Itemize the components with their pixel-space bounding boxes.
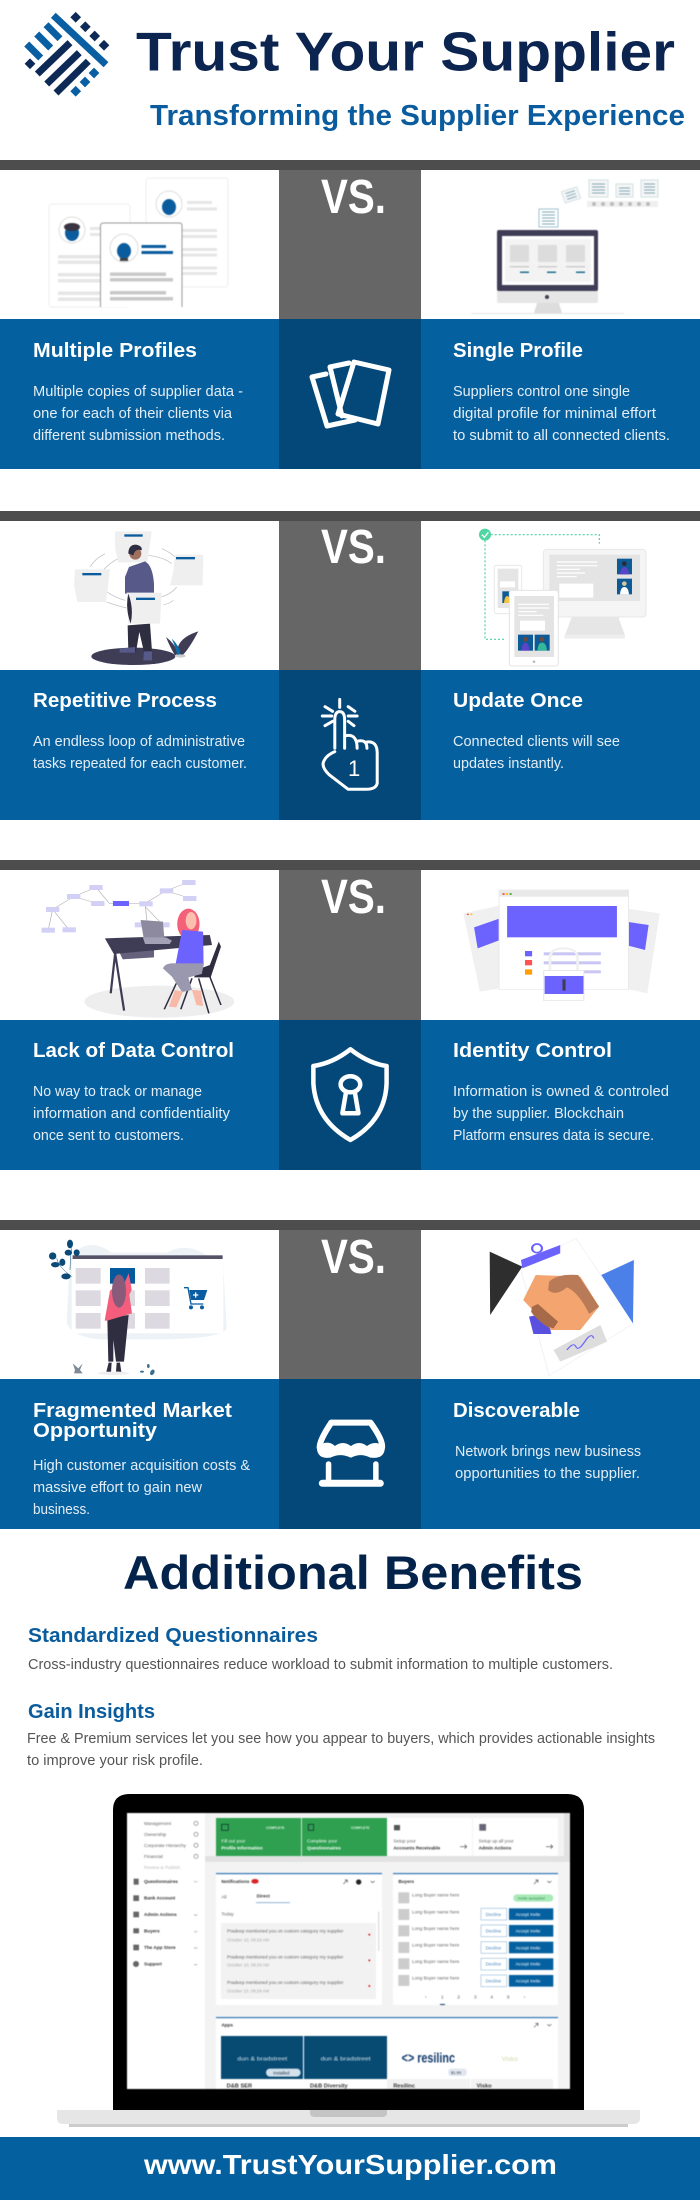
vs label: VS. (321, 171, 386, 224)
sidebar navigation: Support (144, 1962, 162, 1967)
text: lack of data control description: once sent to customers. (33, 1127, 184, 1144)
text: single profile description: to submit to all connected clients. (453, 427, 670, 444)
icon: woven diamond logo (25, 12, 109, 97)
notifications panel: All (221, 1894, 227, 1899)
sidebar navigation (133, 1821, 198, 1967)
notifications panel: October 10, 08:29 AM (227, 1988, 269, 1993)
notifications panel: Direct (257, 1894, 270, 1899)
progress cards: Fill out your (221, 1838, 246, 1843)
buyers panel: Decline (486, 1978, 502, 1983)
heading: repetitive process: Repetitive Process (33, 690, 217, 712)
buyers panel: Long Buyer name here (412, 1893, 460, 1898)
footer (0, 2137, 700, 2200)
buyers panel: Buyers (398, 1879, 415, 1884)
apps panel: Resilinc (393, 2084, 415, 2090)
apps panel: D&B SER (227, 2084, 252, 2090)
panel: additional benefits (27, 1546, 655, 1769)
buyers panel: Long Buyer name here (412, 1976, 460, 1981)
notifications panel: Notifications (221, 1879, 250, 1884)
text: repetitive process description: An endless loop of administrative (33, 733, 245, 750)
sidebar navigation: Review & Publish (144, 1865, 181, 1870)
notifications panel: October 10, 08:29 AM (227, 1963, 269, 1968)
icon: hand clicking once (322, 699, 377, 789)
text: identity control description: Information is owned & controled (453, 1083, 669, 1100)
buyers panel: Accept Invite (516, 1962, 541, 1967)
panel: comparison 3 (0, 860, 700, 1170)
progress cards: Profile Information (221, 1845, 263, 1850)
text: multiple profiles description: different submission methods. (33, 427, 225, 444)
illustration: synced devices (479, 529, 646, 666)
text: fragmented market description: massive effort to gain new (33, 1479, 202, 1496)
apps panel: dun & bradstreet (237, 2056, 288, 2062)
sidebar navigation: Buyers (144, 1929, 160, 1934)
illustration: handshake over contract (490, 1238, 634, 1376)
buyers panel: 4 (490, 1994, 493, 1999)
sidebar navigation: Questionnaires (144, 1879, 178, 1884)
heading: fragmented market opportunity (33, 1400, 232, 1442)
notifications panel: October 10, 08:29 AM (227, 1937, 269, 1942)
illustration: multiple profile cards (49, 178, 228, 307)
vs label: VS. (321, 521, 386, 574)
apps panel: Installed (273, 2070, 290, 2075)
buyers panel: Accept Invite (516, 1929, 541, 1934)
laptop bezel (113, 1794, 584, 2110)
text: update once description (453, 733, 620, 772)
icon: hand clicking once: 1 (348, 756, 360, 781)
buyers panel: ‹ (425, 1994, 427, 1999)
text: multiple profiles description: one for each of their clients via (33, 405, 233, 422)
title: Trust Your Supplier (136, 20, 675, 82)
notifications panel: Pradeep mentioned you on custom category my supplier (227, 1980, 344, 1985)
illustration: secured web pages (463, 890, 660, 1001)
progress cards (216, 1818, 558, 1856)
sidebar navigation: Management (144, 1821, 172, 1826)
heading: discoverable: Discoverable (453, 1400, 580, 1422)
buyers panel: 5 (507, 1994, 510, 1999)
notifications panel: Pradeep mentioned you on custom category my supplier (227, 1929, 344, 1934)
buyers panel: Decline (486, 1912, 502, 1917)
buyers panel: Accept Invite (516, 1945, 541, 1950)
text: update once description: Connected clients will see (453, 733, 620, 750)
panel: comparison 1 (0, 160, 700, 469)
buyers panel: Long Buyer name here (412, 1926, 460, 1931)
subtitle: Transforming the Supplier Experience (150, 100, 685, 132)
text: gain insights description (27, 1730, 655, 1769)
vs label: VS. (321, 871, 386, 924)
text: fragmented market description (33, 1457, 250, 1518)
notifications panel: Pradeep mentioned you on custom category my supplier (227, 1954, 344, 1959)
heading: additional benefits: Additional Benefits (123, 1546, 583, 1599)
progress cards: Setup up all your (479, 1838, 514, 1843)
apps panel: Apps (221, 2022, 233, 2027)
illustration: person surrounded by documents (74, 531, 203, 665)
progress cards: Complete your (307, 1838, 338, 1843)
text: single profile description: Suppliers control one single (453, 383, 630, 400)
buyers panel: Decline (486, 1962, 502, 1967)
heading: fragmented market opportunity: Opportunity (33, 1420, 158, 1442)
buyers panel: Accept Invite (516, 1912, 541, 1917)
text: fragmented market description: business. (33, 1501, 90, 1518)
sidebar navigation: Ownership (144, 1832, 167, 1837)
text: standardized questionnaires description: Cross-industry questionnaires reduce workload to submit information to multiple customers. (28, 1656, 613, 1673)
buyers panel: Decline (486, 1929, 502, 1934)
text: repetitive process description (33, 733, 247, 772)
heading: fragmented market opportunity: Fragmented Market (33, 1400, 232, 1422)
subheading: gain insights: Gain Insights (28, 1701, 155, 1723)
sidebar navigation: Admin Actions (144, 1912, 177, 1917)
progress cards: Questionnaires (307, 1845, 341, 1850)
icon: storefront (318, 1423, 384, 1483)
dashboard screen (127, 1813, 570, 2090)
buyers panel: Accept Invite (516, 1978, 541, 1983)
buyers panel: Long Buyer name here (412, 1959, 460, 1964)
subheading: standardized questionnaires: Standardized Questionnaires (28, 1625, 318, 1647)
text: gain insights description: to improve your risk profile. (27, 1752, 203, 1769)
text: identity control description: Platform ensures data is secure. (453, 1127, 654, 1144)
sidebar navigation: Bank Account (144, 1896, 176, 1901)
text: identity control description (453, 1083, 669, 1144)
text: single profile description: digital profile for minimal effort (453, 405, 657, 422)
sidebar navigation: Financial (144, 1854, 163, 1859)
text: lack of data control description (33, 1083, 230, 1144)
apps panel: <> resilinc (402, 2050, 455, 2066)
buyers panel: Long Buyer name here (412, 1910, 460, 1915)
apps panel: $1.99 (451, 2070, 462, 2075)
apps panel: dun & bradstreet (321, 2056, 371, 2062)
progress cards: Setup your (393, 1838, 416, 1843)
progress cards: COMPLETE (266, 1826, 285, 1830)
buyers panel: 1 (441, 1994, 444, 1999)
text: multiple profiles description (33, 383, 243, 444)
text: discoverable description: Network brings new business (455, 1443, 641, 1460)
icon: shield with keyhole (313, 1049, 387, 1140)
illustration: woman shopping on storefront (49, 1240, 227, 1376)
sidebar navigation: The App Store (144, 1945, 176, 1950)
illustration: woman at desk with data tree (42, 880, 234, 1018)
text: identity control description: by the supplier. Blockchain (453, 1105, 624, 1122)
progress cards: Accounts Receivable (393, 1845, 441, 1850)
text: lack of data control description: information and confidentiality (33, 1105, 230, 1122)
buyers panel (393, 1873, 558, 2005)
buyers panel: 2 (457, 1994, 460, 1999)
text: gain insights description: Free & Premium services let you see how you appear to buyers, which provides actionable insights (27, 1730, 655, 1747)
text: fragmented market description: High customer acquisition costs & (33, 1457, 250, 1474)
laptop mockup (57, 1794, 640, 2127)
text: multiple profiles description: Multiple copies of supplier data - (33, 383, 243, 400)
panel: comparison 4 (0, 1220, 700, 1529)
buyers panel: Invite accepted (518, 1895, 545, 1900)
apps panel: D&B Diversity (310, 2084, 349, 2090)
heading: identity control: Identity Control (453, 1040, 612, 1062)
heading: update once: Update Once (453, 690, 583, 712)
illustration: single profile monitor (471, 180, 658, 314)
buyers panel: Long Buyer name here (412, 1943, 460, 1948)
sidebar navigation: Corporate Hierarchy (144, 1843, 187, 1848)
text: discoverable description (455, 1443, 641, 1482)
heading: lack of data control: Lack of Data Control (33, 1040, 234, 1062)
text: repetitive process description: tasks repeated for each customer. (33, 755, 247, 772)
heading: multiple profiles: Multiple Profiles (33, 340, 197, 362)
apps panel (216, 2017, 558, 2090)
apps panel: Visko (477, 2084, 492, 2090)
text: update once description: updates instantly. (453, 755, 564, 772)
buyers panel: › (524, 1994, 526, 1999)
website url: www.TrustYourSupplier.com (143, 2149, 557, 2180)
notifications panel: Today (221, 1912, 234, 1917)
icon: stacked cards (312, 362, 389, 426)
notifications panel (216, 1873, 382, 2005)
heading: single profile: Single Profile (453, 340, 583, 362)
panel: comparison 2 (0, 511, 700, 820)
text: single profile description (453, 383, 670, 444)
buyers panel: Decline (486, 1945, 502, 1950)
laptop base (57, 2110, 640, 2127)
text: lack of data control description: No way to track or manage (33, 1083, 202, 1100)
text: discoverable description: opportunities to the supplier. (455, 1465, 640, 1482)
header (25, 12, 685, 132)
progress cards: Admin Actions (479, 1845, 512, 1850)
vs label: VS. (321, 1231, 386, 1284)
apps panel: Visko (502, 2056, 518, 2063)
buyers panel: 3 (474, 1994, 477, 1999)
progress cards: COMPLETE (351, 1826, 370, 1830)
